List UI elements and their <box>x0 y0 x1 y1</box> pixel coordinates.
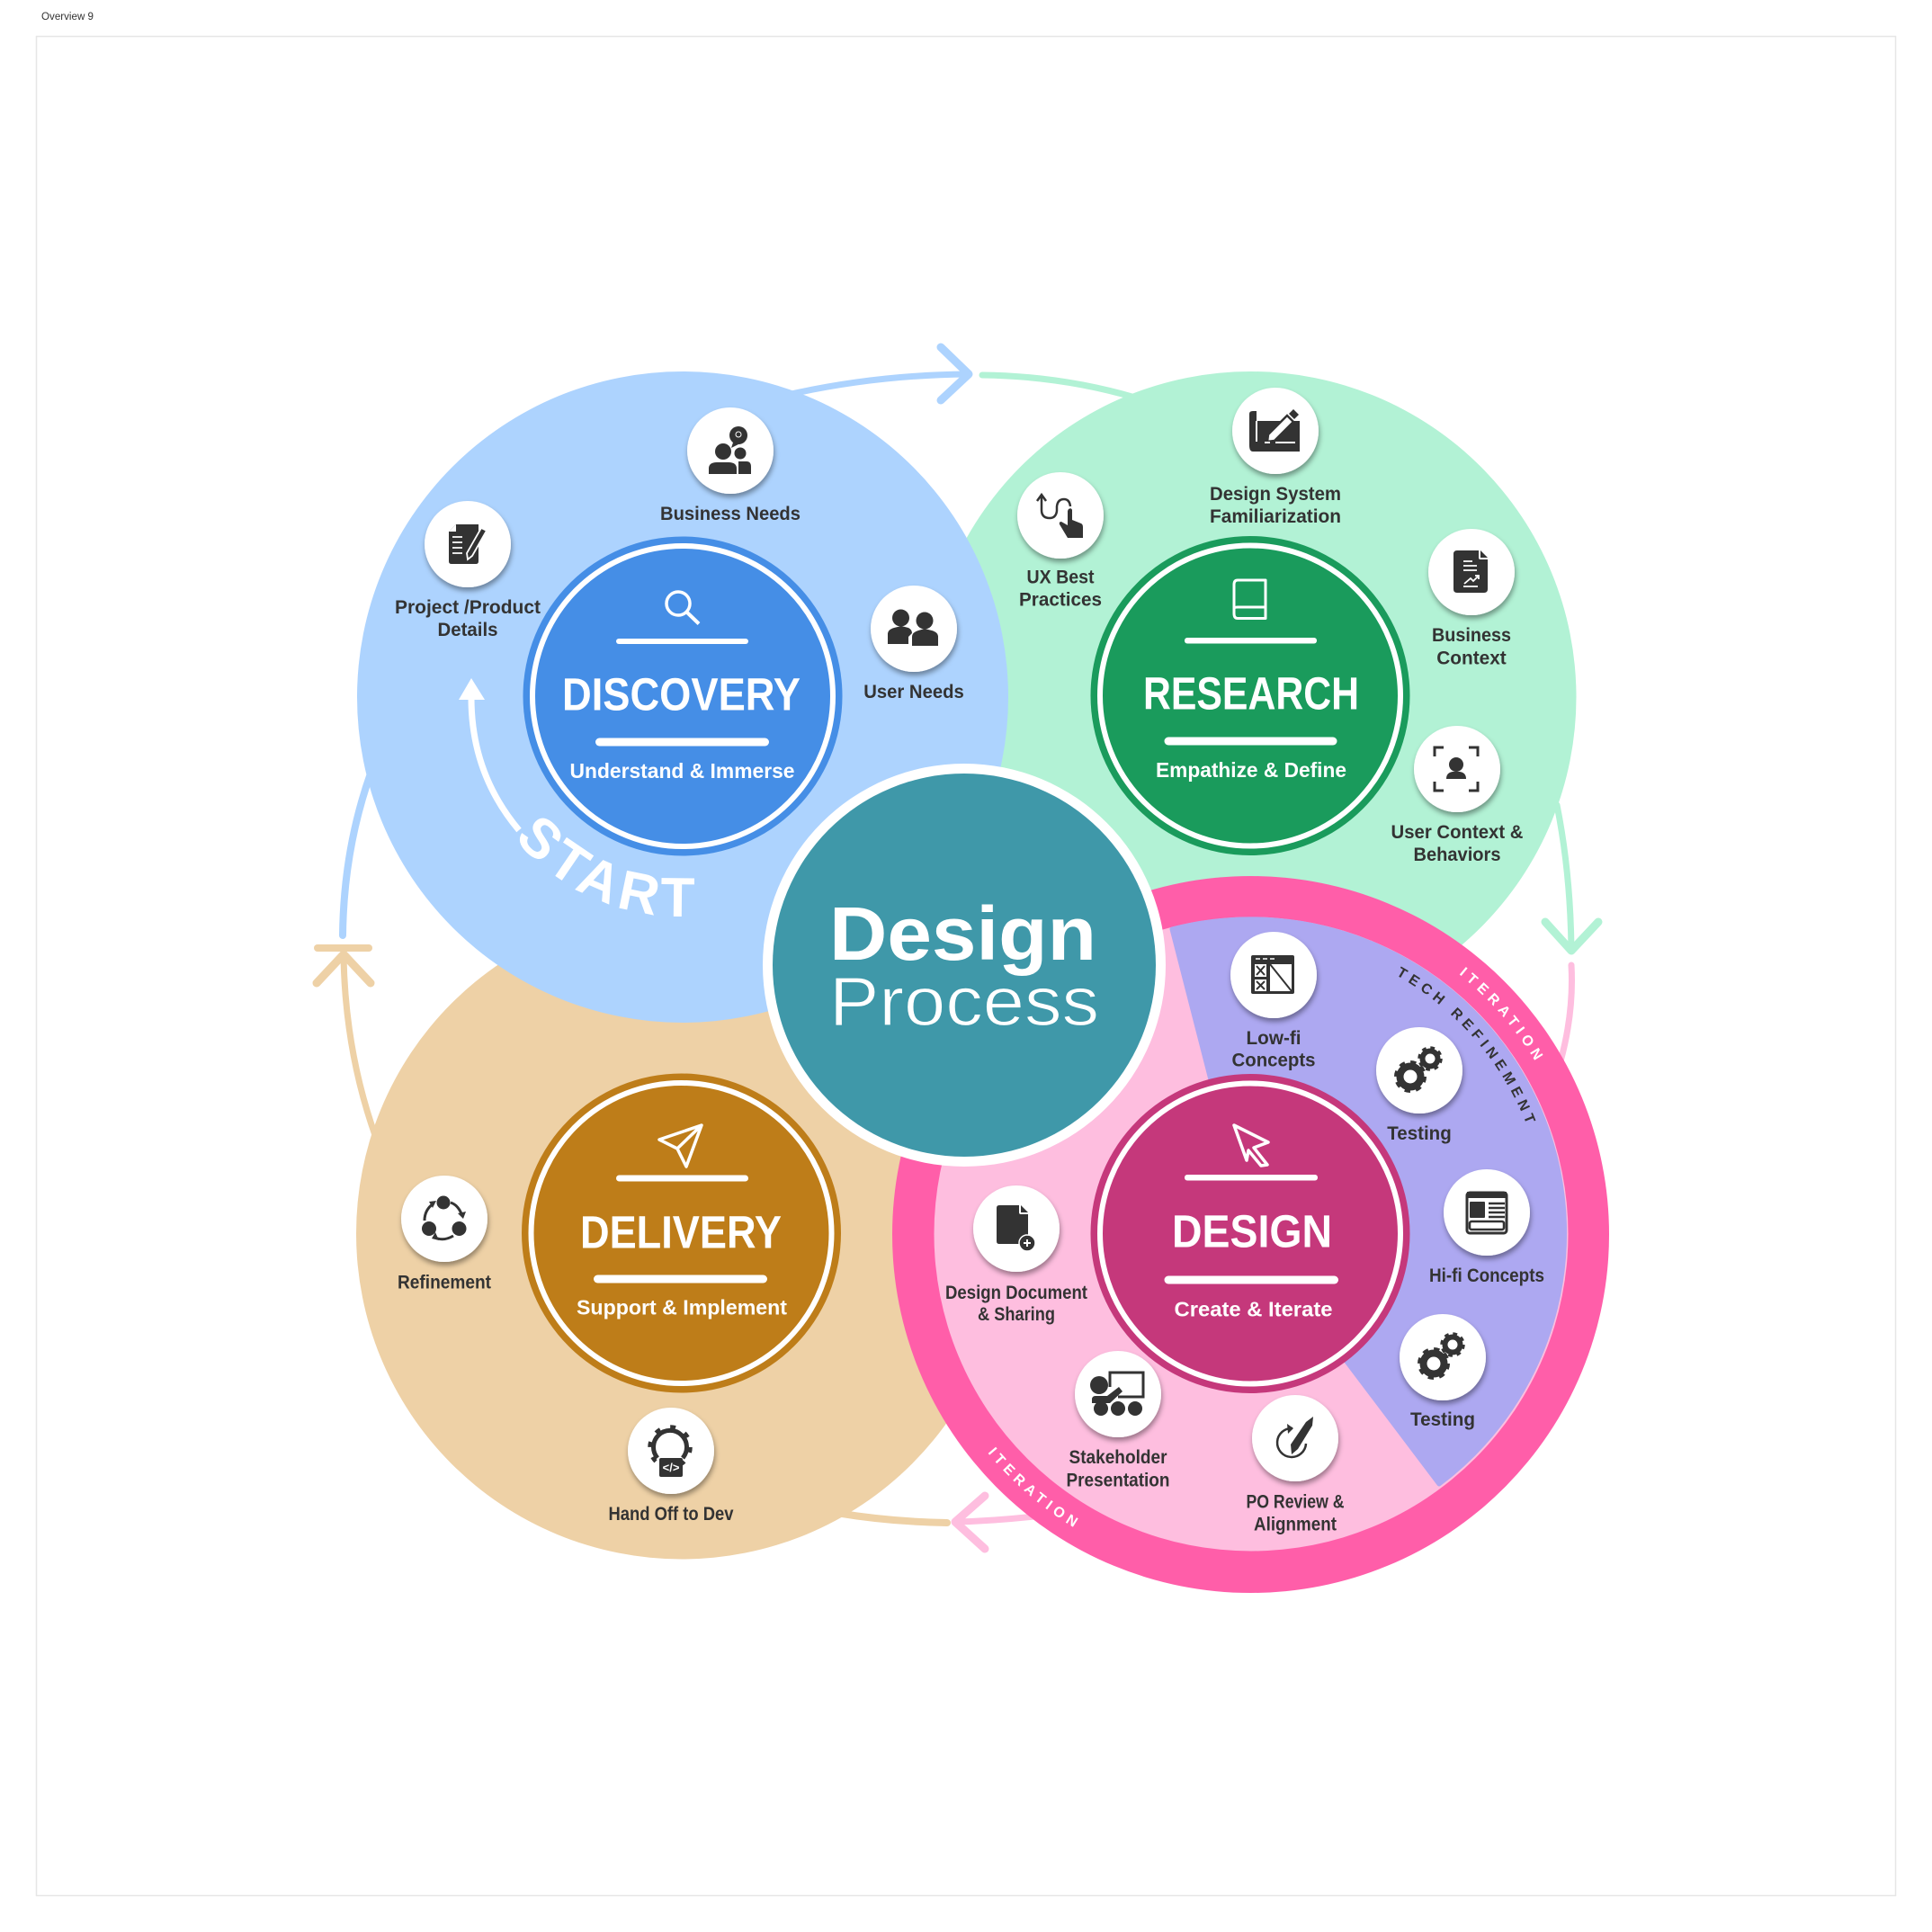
item: design system familiarization: Familiarization <box>1210 506 1341 527</box>
item: design document and sharing: Design Document <box>945 1283 1087 1303</box>
item: project and product details <box>395 501 541 640</box>
item: design document and sharing: & Sharing <box>978 1304 1055 1325</box>
arrow: delivery to discovery <box>317 948 376 1138</box>
arrow: discovery to research <box>792 347 969 400</box>
item: testing two <box>1400 1314 1486 1430</box>
item: low-fi concepts <box>1230 932 1317 1070</box>
discovery subtitle: Understand & Immerse <box>570 759 795 783</box>
item: design system familiarization: Design System <box>1210 484 1341 505</box>
panel: design <box>892 876 1609 1593</box>
heading: design: Design <box>829 891 1096 976</box>
design iteration ring <box>892 876 1609 1593</box>
delivery subtitle: Support & Implement <box>577 1295 787 1319</box>
icon: cursor <box>1234 1125 1268 1166</box>
delivery core <box>522 1074 841 1392</box>
item: stakeholder presentation: Stakeholder <box>1069 1447 1167 1468</box>
discovery outer circle <box>357 371 1008 1023</box>
item: low-fi concepts: Low-fi <box>1247 1028 1301 1049</box>
heading: process: Process <box>829 963 1099 1041</box>
item: testing one <box>1376 1027 1462 1144</box>
item: user context and behaviors: User Context & <box>1391 822 1524 843</box>
item: po review and alignment: PO Review & <box>1247 1491 1344 1513</box>
item: hand off to dev: Hand Off to Dev <box>608 1504 734 1525</box>
item: business context: Business <box>1432 625 1511 646</box>
start label: START <box>520 818 694 917</box>
item: low-fi concepts: Concepts <box>1232 1051 1315 1070</box>
research outer circle <box>925 371 1576 1023</box>
icon: book <box>1234 580 1266 619</box>
arrow: delivery bottom curve <box>836 1513 947 1523</box>
item: project and product details: Details <box>437 620 498 640</box>
arrow: research curve <box>982 375 1135 398</box>
arrow: design right curve <box>1561 965 1572 1061</box>
item: project and product details: Project /Product <box>395 597 541 618</box>
discovery core <box>523 536 842 856</box>
item: po review and alignment: Alignment <box>1254 1515 1337 1534</box>
item: user needs <box>863 586 964 702</box>
item: ux best practices: UX Best <box>1027 567 1094 588</box>
item: design system familiarization <box>1210 388 1341 527</box>
item: ux best practices <box>1017 472 1104 610</box>
start arrow <box>459 678 519 830</box>
item: hand off to dev: </> <box>663 1461 680 1474</box>
research title: RESEARCH <box>1143 667 1359 720</box>
panel: research <box>925 371 1576 1023</box>
design subtitle: Create & Iterate <box>1175 1297 1333 1320</box>
item: business needs <box>660 407 801 524</box>
frame title: Overview 9 <box>41 12 94 22</box>
item: refinement <box>398 1176 491 1293</box>
center badge <box>763 764 1166 1167</box>
delivery outer circle <box>356 908 1007 1560</box>
item: user context and behaviors: Behaviors <box>1414 845 1500 865</box>
icon: magnifier <box>666 592 699 624</box>
curved label: tech refinement: TECH REFINEMENT <box>1399 966 1536 1122</box>
design title: DESIGN <box>1172 1205 1332 1257</box>
panel: discovery <box>357 371 1008 1023</box>
item: hi-fi concepts <box>1429 1169 1544 1286</box>
item: business needs: Business Needs <box>660 504 801 524</box>
item: refinement: Refinement <box>398 1272 491 1293</box>
item: design document and sharing <box>945 1185 1087 1325</box>
tech refinement sector <box>1172 919 1565 1484</box>
item: business context: Context <box>1436 648 1507 669</box>
item: stakeholder presentation: Presentation <box>1067 1470 1169 1491</box>
item: user needs: User Needs <box>863 682 964 702</box>
arrow: discovery left curve <box>343 774 371 935</box>
research core <box>1090 536 1410 855</box>
item: user context and behaviors <box>1391 726 1524 865</box>
design inner area <box>934 917 1569 1551</box>
item: hand off to dev <box>608 1408 734 1525</box>
curved label: iteration top: ITERATION <box>1459 967 1543 1060</box>
panel: delivery <box>356 908 1007 1560</box>
arrow: research to design <box>1545 805 1598 951</box>
arrow: design to delivery <box>955 1496 1034 1549</box>
item: hi-fi concepts: Hi-fi Concepts <box>1429 1266 1544 1286</box>
item: business context <box>1428 529 1515 669</box>
icon: paper plane <box>659 1125 702 1167</box>
item: stakeholder presentation <box>1067 1351 1169 1491</box>
research subtitle: Empathize & Define <box>1156 758 1346 782</box>
item: ux best practices: Practices <box>1019 590 1102 610</box>
curved label: iteration bottom: ITERATION <box>988 1446 1078 1527</box>
item: testing two: Testing <box>1410 1409 1475 1430</box>
discovery title: DISCOVERY <box>562 669 801 720</box>
design core <box>1090 1074 1410 1393</box>
item: testing one: Testing <box>1387 1123 1452 1144</box>
item: po review and alignment <box>1247 1395 1344 1534</box>
delivery title: DELIVERY <box>580 1207 782 1257</box>
